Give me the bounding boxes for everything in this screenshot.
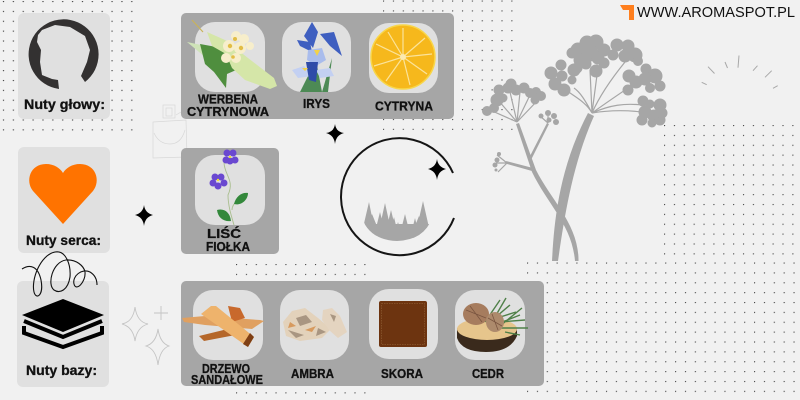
label: WERBENA [198,92,259,106]
icon: moon ring with forest [341,138,454,255]
label: DRZEWO [202,361,250,376]
tile: cytryna [369,23,438,114]
illustration: plant silhouette [484,36,666,261]
tile: ambra [280,290,349,381]
panel: heart notes [181,148,279,254]
icon: outline sparkles [122,306,169,365]
icon: black sparkle left [135,205,153,226]
icon: orange heart [29,164,97,224]
label: cytrynowa: CYTRYNOWA [187,104,270,119]
heading: nuty glowy: Nuty głowy: [24,97,105,112]
label: CEDR [472,366,505,381]
label: fiolka: FIOŁKA [206,239,251,254]
panel: nuty bazy [17,281,109,387]
icon: black sparkle top [326,124,344,144]
tile: skora [369,289,438,381]
icon: forest silhouette [364,202,429,241]
panel: base notes [181,281,544,387]
tile: irys [282,22,351,111]
decoration: squiggle [22,252,97,296]
panel: nuty serca [18,147,110,253]
label: AMBRA [291,366,335,381]
heading: nuty serca: Nuty serca: [26,233,101,248]
tile: cedr [455,290,528,381]
label: SKORA [381,366,424,381]
panel: nuty glowy [18,13,110,119]
icon: perfume bottle outline [153,105,187,158]
icon: stacked layers [22,299,104,347]
panel: top notes [181,13,454,119]
umbel clusters [484,36,666,126]
heading: nuty bazy: Nuty bazy: [26,363,97,378]
tile: drzewo sandalowe [182,290,264,376]
label: LIŚĆ [207,226,242,241]
icon: sun rays [702,56,778,88]
tile: werbena cytrynowa [187,20,277,106]
label: IRYS [303,96,330,111]
label: sandalowe: SANDAŁOWE [191,372,263,387]
icon: head profile ring [29,19,99,89]
icon: black sparkle on ring [428,159,446,180]
label: CYTRYNA [375,98,434,114]
logo: aromaspot url: WWW.AROMASPOT.PL [637,5,795,21]
